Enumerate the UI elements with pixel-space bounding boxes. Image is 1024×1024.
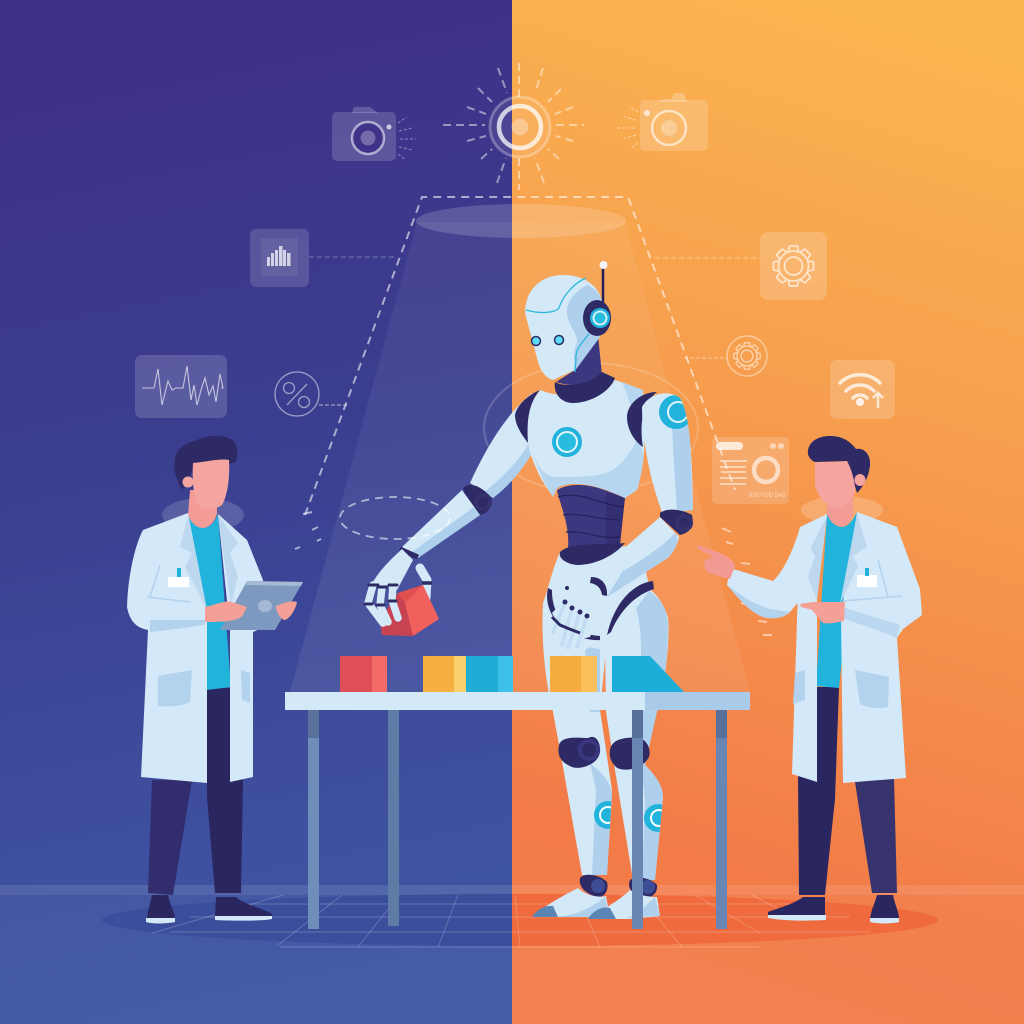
blocks on the table — [340, 656, 684, 692]
red block — [340, 656, 387, 692]
scientist right pointing — [697, 436, 922, 924]
icon: small gear circle — [684, 336, 767, 376]
tablet — [220, 581, 303, 630]
icon: dashboard card — [712, 437, 789, 504]
icon: percent circle — [275, 372, 348, 416]
robot left upper arm — [470, 393, 533, 498]
badge — [168, 568, 189, 587]
yellow block two — [550, 656, 597, 692]
icon: dashboard card: 605 FUD 5A5 — [749, 493, 786, 499]
robot left fingers — [365, 585, 398, 623]
icon: bar chart tile — [250, 229, 397, 287]
robot left forearm and hand — [372, 485, 492, 598]
blue block — [466, 656, 513, 692]
robot torso — [515, 380, 657, 498]
skin neck — [188, 490, 217, 528]
floor with grid — [0, 885, 1024, 948]
cyan shirt — [816, 512, 857, 688]
halo behind shoulders — [162, 498, 244, 532]
trousers — [798, 687, 897, 895]
icon: camera right — [617, 93, 708, 151]
hair and head — [174, 436, 237, 509]
cyan shirt — [188, 514, 231, 690]
lab coat — [727, 512, 922, 783]
robot — [365, 261, 693, 919]
icon: large gear tile — [655, 232, 827, 300]
hair and head — [808, 436, 870, 508]
badge — [857, 568, 877, 587]
icon: pulse waveform tile — [135, 355, 227, 418]
icon: camera left — [332, 107, 416, 161]
light disc on top of frame — [416, 204, 626, 238]
yellow block — [423, 656, 466, 692]
coat arm — [727, 527, 812, 618]
robot legs — [532, 588, 672, 919]
dashed manipulation ellipse and scattered marks — [295, 497, 772, 635]
hands — [205, 601, 297, 622]
robot head — [525, 261, 611, 380]
robot right forearm and hand — [552, 510, 693, 648]
table — [285, 692, 750, 929]
skin neck — [827, 490, 853, 527]
spotlight cone — [290, 222, 750, 692]
red cube — [380, 585, 439, 636]
lab coat — [127, 513, 263, 783]
robot pelvis and waist — [543, 485, 654, 650]
scientist left with tablet — [127, 436, 303, 924]
trousers — [148, 688, 243, 895]
pointing hand — [697, 545, 735, 579]
blue wedge — [612, 656, 684, 692]
robot neck — [555, 335, 615, 403]
faint ring behind robot — [484, 363, 698, 493]
robot right upper arm — [642, 393, 693, 512]
icon: wifi tile — [830, 360, 895, 419]
shoes — [768, 895, 899, 924]
shoes — [146, 895, 272, 924]
overhead sensor with rays — [443, 63, 584, 190]
pointing hand lower — [800, 602, 845, 623]
halo behind shoulders — [801, 496, 883, 524]
dashed projection frame — [305, 197, 735, 515]
